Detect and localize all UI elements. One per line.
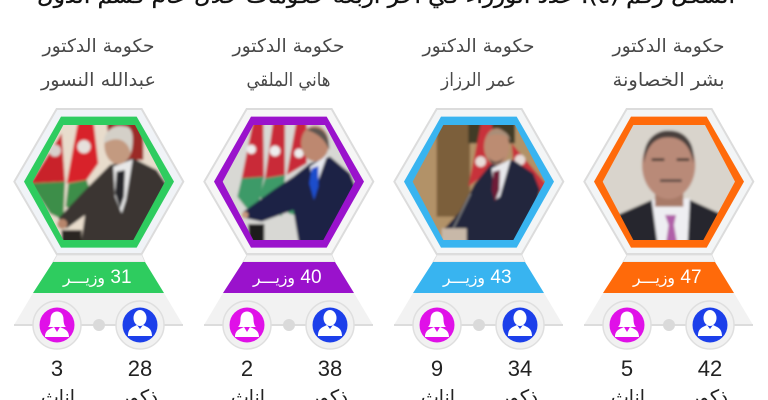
government name: [40, 36, 156, 91]
panel: Abdullah Ensour government: [14, 36, 183, 400]
male count: 38: [318, 356, 342, 381]
female count: [611, 356, 645, 400]
icon: male minister: [116, 301, 164, 349]
portrait photo: [222, 125, 355, 240]
total ministers band: [413, 262, 544, 293]
government name: عبدالله النسور: [40, 70, 156, 91]
male count: [689, 356, 728, 400]
base trapezoid: [204, 293, 373, 331]
government name: [611, 36, 724, 91]
panel: Bisher Al-Khasawneh government: [584, 36, 753, 400]
base trapezoid: [394, 293, 563, 331]
female count: 3: [51, 356, 63, 381]
total ministers band: 47: [680, 267, 702, 288]
hexagon frame: [14, 109, 183, 254]
icon: female minister: [413, 301, 461, 349]
female count: 2: [241, 356, 253, 381]
government name: بشر الخصاونة: [612, 70, 724, 91]
icon: female minister: [603, 301, 651, 349]
icon: female minister: [223, 301, 271, 349]
female count: [231, 356, 265, 400]
hexagon frame: [584, 109, 753, 254]
female count: 9: [431, 356, 443, 381]
total ministers band: [603, 262, 734, 293]
icon: male minister: [686, 301, 734, 349]
government name: [421, 36, 534, 91]
male count: [309, 356, 348, 400]
female count: 5: [621, 356, 633, 381]
icon: male minister: [496, 301, 544, 349]
hexagon frame: [394, 109, 563, 254]
base trapezoid: [584, 293, 753, 331]
total ministers band: 43: [490, 267, 512, 288]
total ministers band: وزيـــر: [62, 268, 105, 288]
government name: حكومة الدكتور: [421, 36, 534, 57]
connector strip: [623, 255, 715, 262]
base trapezoid: [14, 293, 183, 331]
panel: Hani Al-Mulki government: [204, 36, 373, 400]
government name: حكومة الدكتور: [611, 36, 724, 57]
icon: female minister: [33, 301, 81, 349]
total ministers band: 40: [300, 267, 322, 288]
total ministers band: وزيـــر: [252, 268, 295, 288]
government name: [231, 36, 344, 91]
male count: [499, 356, 538, 400]
government name: هاني الملقي: [246, 70, 330, 91]
portrait photo: [602, 125, 735, 240]
government name: حكومة الدكتور: [41, 36, 154, 57]
male count: 34: [508, 356, 532, 381]
male count: [119, 356, 158, 400]
female count: [421, 356, 455, 400]
total ministers band: [223, 262, 354, 293]
hexagon frame: [204, 109, 373, 254]
total ministers band: وزيـــر: [632, 268, 675, 288]
portrait photo: [32, 125, 165, 240]
connector strip: [53, 255, 145, 262]
total ministers band: [33, 262, 164, 293]
government name: عمر الرزاز: [440, 70, 516, 91]
panel: Omar Al-Razzaz government: [394, 36, 563, 400]
total ministers band: وزيـــر: [442, 268, 485, 288]
female count: [41, 356, 75, 400]
connector strip: [243, 255, 335, 262]
government name: حكومة الدكتور: [231, 36, 344, 57]
portrait photo: [412, 125, 545, 240]
male count: 42: [698, 356, 722, 381]
icon: male minister: [306, 301, 354, 349]
total ministers band: 31: [110, 267, 132, 288]
male count: 28: [128, 356, 152, 381]
connector strip: [433, 255, 525, 262]
